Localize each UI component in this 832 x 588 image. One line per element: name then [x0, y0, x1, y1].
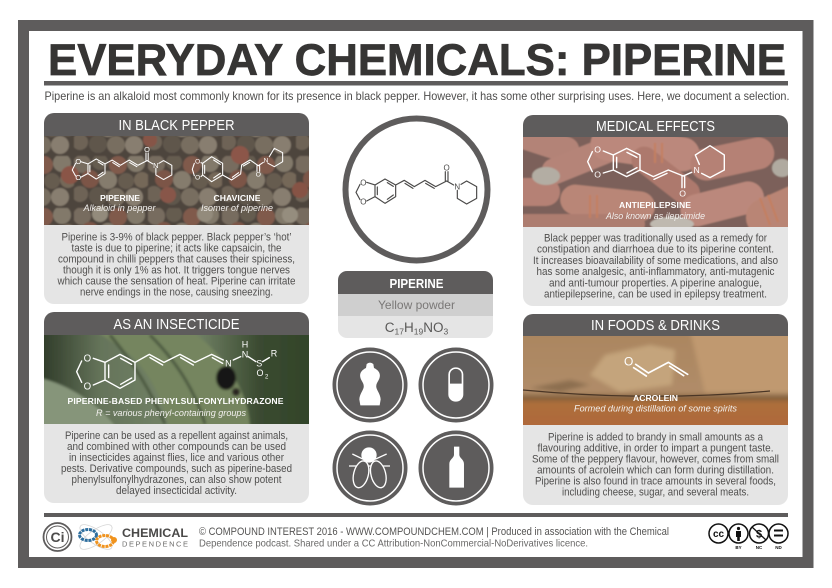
credits text: © COMPOUND INTEREST 2016 - WWW.COMPOUNDCHEM.COM | Produced in association with the Chemical	[199, 526, 669, 538]
central piperine structure circle: N	[454, 183, 460, 192]
icon: creative commons badges: ND	[775, 545, 782, 550]
molecule: phenylsulfonylhydrazone: N	[225, 358, 232, 368]
icon: creative commons badges: BY	[735, 545, 742, 550]
caption: antiepilepsine: Also known as ilepcimide	[605, 211, 705, 222]
body text: which cause the sensation of heat. Piperine can irritate	[57, 276, 295, 288]
panel: in black pepper	[40, 113, 315, 304]
molecule: antiepilepsine: N	[694, 165, 700, 175]
molecule: antiepilepsine: O	[594, 169, 601, 179]
panel: in foods and drinks	[518, 314, 793, 505]
title: EVERYDAY CHEMICALS: PIPERINE	[48, 36, 786, 85]
logo: chemical dependence: DEPENDENCE	[122, 540, 188, 548]
molecule: phenylsulfonylhydrazone: 2	[265, 374, 269, 380]
appearance: Yellow powder	[378, 298, 455, 312]
photo: brandy glass	[523, 336, 788, 425]
photo: insect on leaf	[44, 335, 309, 424]
body text: in insecticides against flies, lice and various other	[69, 452, 284, 464]
molecule: phenylsulfonylhydrazone: R	[271, 349, 278, 359]
body text	[533, 232, 778, 300]
photo: pills	[523, 137, 788, 227]
label: acrolein: ACROLEIN	[633, 393, 678, 403]
body text: Piperine is added to brandy in small amounts as a	[548, 432, 764, 444]
formula: C	[385, 320, 395, 335]
label: piperine: PIPERINE	[100, 193, 140, 203]
body text	[57, 232, 295, 298]
panel header	[44, 312, 309, 335]
panel body	[44, 424, 309, 503]
properties table	[338, 271, 493, 338]
molecule: chavicine	[192, 148, 283, 182]
body text: Piperine can be used as a repellent against animals,	[65, 430, 288, 442]
panel header	[523, 314, 788, 336]
molecule: antiepilepsine: O	[679, 189, 686, 199]
body text: and anti-tumour properties. A piperine analogue,	[549, 277, 762, 289]
molecule: phenylsulfonylhydrazone: S	[256, 358, 262, 368]
body text: Some of the peppery flavour, however, comes from small	[532, 454, 779, 466]
logo: compound interest: Ci	[50, 529, 64, 545]
icon: creative commons badges	[709, 524, 788, 550]
molecule: chavicine: O	[195, 159, 200, 166]
molecule: piperine: N	[153, 161, 159, 170]
formula: H	[404, 320, 414, 335]
molecule: chavicine: O	[195, 174, 200, 181]
formula: NO	[423, 320, 443, 335]
body text: constipation and diarrhoea due to its piperine content.	[537, 244, 774, 256]
caption: piperine: Alkaloid in pepper	[83, 203, 156, 214]
molecule: chavicine: O	[256, 171, 261, 178]
molecule: antiepilepsine: O	[594, 144, 601, 154]
formula: 17	[395, 326, 404, 336]
credits text	[199, 526, 669, 550]
central piperine structure circle: O	[360, 198, 366, 207]
body text: Piperine is also found in trace amounts in several foods,	[535, 476, 776, 488]
intro text: Piperine is an alkaloid most commonly known for its presence in black pepper. However, it has some other surprising uses. Here, we document a selection.	[44, 89, 790, 103]
caption: chavicine: Isomer of piperine	[201, 203, 273, 214]
logo: compound interest	[44, 523, 72, 551]
body text: flavouring additive, in order to impart a pungent taste.	[538, 442, 774, 454]
icon: pepper mill	[332, 348, 408, 422]
heading: AS AN INSECTICIDE	[114, 316, 240, 333]
heading: MEDICAL EFFECTS	[596, 118, 715, 135]
molecule: antiepilepsine	[588, 144, 724, 199]
molecule: piperine	[72, 145, 172, 182]
icon: creative commons badges: $	[756, 528, 762, 540]
icon: creative commons badges: cc	[713, 529, 724, 540]
title underline	[44, 81, 788, 86]
central piperine structure circle: O	[444, 164, 450, 173]
molecule: piperine: O	[75, 157, 81, 166]
icon: capsule	[418, 348, 494, 422]
table header	[338, 271, 493, 294]
body text: compound in chilli peppers that causes their spiciness,	[58, 254, 295, 266]
footer divider	[44, 513, 788, 517]
formula: 3	[443, 326, 448, 336]
body text: including cheese, sugar, and several meats.	[562, 486, 749, 498]
molecule: acrolein: O	[624, 354, 633, 368]
molecule: piperine: O	[75, 173, 81, 182]
molecule: chavicine: N	[264, 157, 269, 164]
molecule: phenylsulfonylhydrazone: O	[84, 354, 92, 365]
body text: It increases bioavailability of some medications, and also	[533, 255, 778, 267]
table row: appearance background	[338, 294, 493, 316]
panel: as an insecticide	[40, 312, 315, 503]
caption: acrolein: Formed during distillation of some spirits	[574, 404, 737, 414]
icon: bottle	[418, 430, 494, 506]
body text	[532, 432, 779, 498]
label: antiepilepsine: ANTIEPILEPSINE	[619, 200, 691, 210]
label: compound name: PIPERINE-BASED PHENYLSULFONYLHYDRAZONE	[68, 396, 284, 406]
panel header	[523, 115, 788, 137]
body text: Piperine is 3-9% of black pepper. Black pepper’s ‘hot’	[62, 232, 292, 244]
body text: Black pepper was traditionally used as a remedy for	[544, 232, 767, 244]
label: chavicine: CHAVICINE	[214, 193, 261, 203]
central piperine structure circle: O	[360, 178, 366, 187]
body text: though it is only 1% as hot. It triggers tongue nerves	[63, 264, 290, 276]
body text: taste is due to piperine; it acts like capsaicin, the	[72, 242, 282, 254]
body text: and combined with other compounds can be used	[67, 441, 286, 453]
molecule: phenylsulfonylhydrazone	[77, 340, 278, 393]
molecule: phenylsulfonylhydrazone: O	[256, 368, 263, 378]
body text: nerve endings in the nose, causing sneezing.	[80, 286, 273, 298]
logo: chemical dependence	[76, 520, 188, 554]
table row: formula background	[338, 316, 493, 338]
panel body	[44, 225, 309, 304]
body text	[61, 430, 292, 497]
icon: fly	[332, 430, 408, 506]
photo: peppercorns	[44, 136, 309, 225]
molecule: phenylsulfonylhydrazone: H	[242, 340, 248, 350]
panel header	[44, 113, 309, 136]
panel: medical effects	[523, 115, 788, 306]
panel body	[523, 425, 788, 505]
heading: IN FOODS & DRINKS	[591, 317, 720, 334]
heading: IN BLACK PEPPER	[118, 117, 235, 134]
body text: delayed insecticidal activity.	[116, 485, 237, 497]
panel body	[523, 227, 788, 306]
credits text: Dependence podcast. Shared under a CC Attribution-NonCommercial-NoDerivatives licence.	[199, 538, 588, 550]
molecule: phenylsulfonylhydrazone: N	[242, 350, 248, 360]
body text: phenylsulfonylhydrazones, can also show potent	[72, 474, 282, 486]
body text: has some analgesic, anti-inflammatory, anti-mutagenic	[536, 266, 775, 278]
body text: amounts of acrolein which can form during distillation.	[537, 464, 774, 476]
body text: antiepilepserine, can be used in epilepsy treatment.	[544, 288, 767, 300]
molecule: phenylsulfonylhydrazone: O	[84, 382, 92, 393]
caption: compound: R = various phenyl-containing groups	[96, 408, 246, 419]
molecule: piperine: O	[144, 145, 150, 154]
table title: PIPERINE	[390, 277, 444, 291]
central piperine structure circle	[346, 118, 488, 260]
logo: chemical dependence: CHEMICAL	[122, 526, 188, 540]
body text: pests. Derivative compounds, such as piperine-based	[61, 463, 292, 475]
icon: creative commons badges: NC	[756, 545, 763, 550]
molecule: acrolein	[624, 354, 688, 376]
formula: 19	[414, 326, 423, 336]
